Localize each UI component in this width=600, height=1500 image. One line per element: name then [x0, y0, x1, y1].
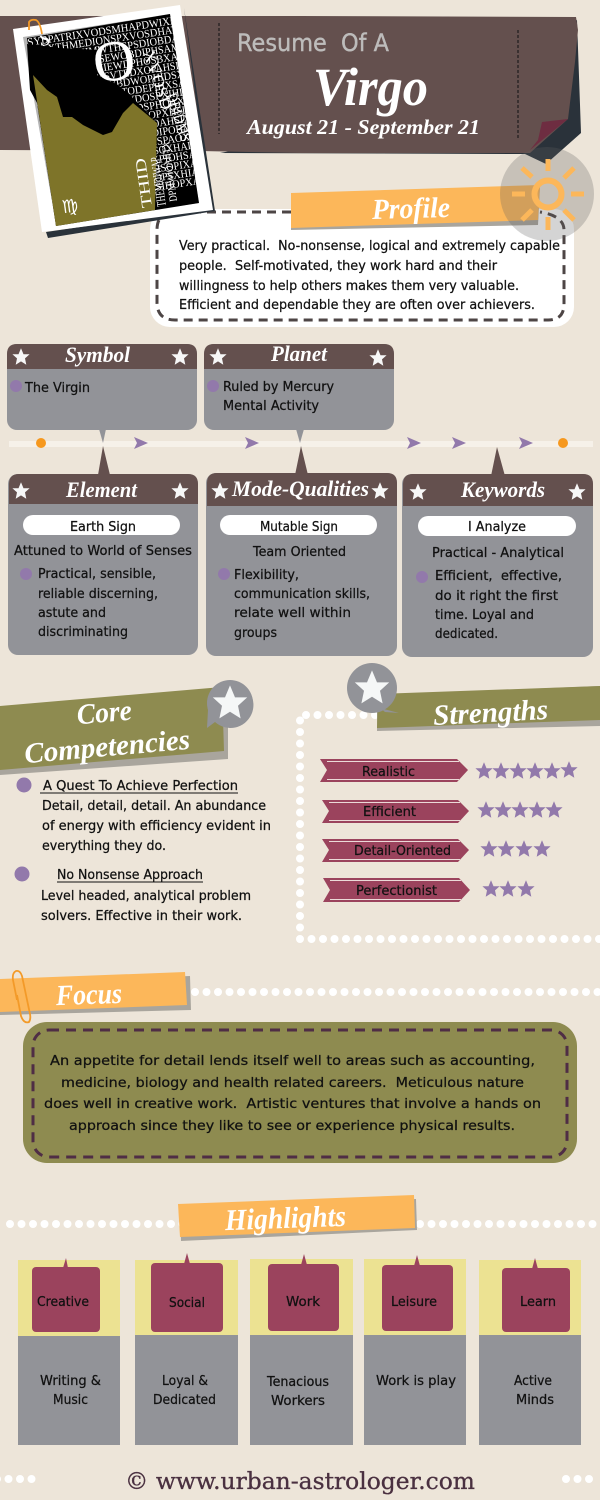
photo card: PSAXTHMEDIONSPXVOSDHAT — [28, 24, 179, 58]
panel: planet: Ruled by Mercury — [223, 380, 334, 395]
highlight: learn: Learn — [520, 1295, 556, 1310]
panel: element: Practical, sensible, — [38, 567, 156, 582]
photo card: HMDSOAPXIWEVTBDHSOPIXA — [48, 157, 198, 191]
header kicker: Resume Of A — [237, 29, 390, 57]
core competencies list: of energy with efficiency evident in — [42, 819, 271, 834]
ribbon: perfectionist: Perfectionist — [356, 884, 437, 899]
highlight: social: Social — [169, 1296, 205, 1311]
panel: mode-qualities: Flexibility, — [234, 568, 299, 583]
photo card: SDIWHPOXAEMTBVDSIHOPXA — [51, 175, 201, 209]
focus dotted line — [195, 988, 600, 996]
panel: element: astute and — [38, 606, 106, 621]
core competencies banner — [0, 680, 253, 775]
profile text box: willingness to help others makes them very valuable. — [179, 279, 519, 294]
photo card: BTPDSOMXAHIVWEDPSOXHAD — [45, 139, 196, 173]
profile banner: Profile — [371, 192, 450, 226]
photo card: MXSIWDHOPEBTAVXSDIPOHM — [43, 122, 193, 156]
panel: planet — [204, 341, 394, 443]
core competencies banner: Core — [75, 695, 133, 731]
photo card: IDOBXSHPEAWMTVDIOPXHSD — [40, 104, 190, 138]
photo card: EIXHDPAOVSTBMDWXPIOHSA — [47, 148, 197, 182]
photo card: THEMDIWAP — [147, 156, 169, 208]
rating: detail-oriented stars — [480, 840, 551, 857]
focus text panel: approach since they like to see or experience physical results. — [69, 1119, 515, 1134]
highlight: creative: Music — [53, 1393, 88, 1408]
panel: element: discriminating — [38, 625, 128, 640]
profile text box: people. Self-motivated, they work hard and their — [179, 259, 498, 274]
photo card: AOTBXPSIDMEHWVDOPSXHIA — [49, 166, 200, 200]
panel: mode-qualities: Team Oriented — [252, 545, 346, 560]
footer url: © www.urban-astrologer.com — [125, 1469, 475, 1495]
virgo sign: ♍︎ — [61, 195, 80, 218]
highlight: leisure: Leisure — [391, 1295, 437, 1310]
title: Virgo — [313, 57, 428, 117]
ribbon: perfectionist — [323, 878, 470, 902]
photo card: DPMWIOAHTX — [160, 141, 180, 202]
photo card: DIMPAXVOHTSEWOBDIPHSAM — [31, 42, 181, 76]
photo card: THID — [133, 157, 156, 209]
highlight: creative: Creative — [37, 1295, 89, 1310]
panel: symbol — [7, 342, 197, 443]
rating: realistic stars — [475, 761, 578, 779]
panel: planet: Planet — [270, 341, 328, 366]
photo card: S — [38, 28, 52, 51]
panel: keywords: Efficient, effective, — [435, 569, 562, 584]
core competencies list: everything they do. — [42, 839, 166, 854]
rating: efficient stars — [477, 801, 563, 818]
strengths banner — [347, 663, 600, 732]
panel: mode-qualities — [206, 446, 397, 656]
photo card: XVSDOPAHIMWTHEPSDIOBDA — [30, 33, 180, 67]
photo card — [13, 5, 215, 238]
core competencies banner: Competencies — [23, 724, 191, 770]
panel: element: Attuned to World of Senses — [14, 544, 192, 559]
photo card: O — [89, 26, 139, 96]
core competencies list: solvers. Effective in their work. — [41, 909, 242, 924]
rating: perfectionist stars — [482, 880, 535, 897]
panel: planet: Mental Activity — [223, 399, 319, 414]
focus text panel: does well in creative work. Artistic ventures that involve a hands on — [44, 1097, 541, 1112]
highlight: work: Workers — [271, 1394, 325, 1409]
highlight: leisure — [364, 1255, 466, 1445]
profile text box: Very practical. No-nonsense, logical and extremely capable — [179, 239, 560, 254]
photo card: DBIDMS — [162, 91, 194, 144]
highlight: learn — [479, 1258, 581, 1445]
dates: August 21 - September 21 — [245, 115, 480, 139]
profile banner — [291, 185, 540, 230]
panel: element: Element — [65, 477, 138, 502]
highlight: work: Work — [286, 1295, 320, 1310]
highlight: creative — [18, 1258, 120, 1445]
profile text box: Efficient and dependable they are often over achievers. — [179, 298, 535, 313]
highlight: social: Dedicated — [153, 1393, 216, 1408]
profile text box — [150, 209, 574, 327]
timeline — [9, 437, 593, 449]
ribbon: efficient: Efficient — [363, 805, 416, 820]
photo card: PAHTDVOMSXIEBWDPOAHSIX — [41, 113, 192, 147]
photo card: SYBPATRIXVODSMHAPDWIXE — [27, 15, 177, 49]
core competencies list: Level headed, analytical problem — [41, 889, 251, 904]
panel: mode-qualities: groups — [234, 626, 277, 641]
panel: element: Earth Sign — [70, 520, 136, 535]
highlights banner — [178, 1195, 417, 1241]
icon: star badge — [207, 680, 253, 728]
paper clip — [29, 20, 42, 34]
ribbon: detail-oriented: Detail-Oriented — [354, 844, 451, 859]
photo card: WBDXSPOIHTMEAVDOSPXIHD — [37, 86, 188, 120]
highlight: learn: Minds — [516, 1393, 554, 1408]
panel: symbol: Symbol — [65, 342, 131, 367]
panel: keywords: Keywords — [460, 477, 545, 502]
panel: mode-qualities: communication skills, — [234, 587, 370, 602]
ribbon: detail-oriented — [322, 839, 469, 862]
panel: keywords: Practical - Analytical — [432, 546, 564, 561]
ribbon: realistic: Realistic — [362, 765, 415, 780]
panel: keywords: time. Loyal and — [435, 608, 534, 623]
focus text panel: An appetite for detail lends itself well to areas such as accounting, — [50, 1054, 535, 1069]
footer dots — [0, 1475, 600, 1483]
highlight: creative: Writing & — [40, 1374, 101, 1389]
panel: symbol: The Virgin — [24, 381, 90, 396]
core competencies list — [14, 778, 271, 924]
core competencies list: Detail, detail, detail. An abundance — [42, 799, 266, 814]
photo card: OVIPDHAXSMWBTODEPIHXSA — [36, 77, 186, 111]
panel: mode-qualities: Mutable Sign — [260, 520, 338, 535]
photo card: HOSPXMTADVIEWDPHOSBXAI — [32, 50, 183, 84]
paper clip — [13, 971, 30, 1022]
panel: mode-qualities: relate well within — [234, 606, 351, 621]
photo card: AXDBPIWOHMSVTEDXOPAHSD — [34, 59, 184, 93]
panel: mode-qualities: Mode-Qualities — [231, 476, 369, 501]
ribbon: efficient — [322, 800, 469, 823]
highlight: leisure: Work is play — [376, 1374, 456, 1389]
highlight: work: Tenacious — [266, 1375, 329, 1390]
strengths banner: Strengths — [432, 694, 549, 732]
strengths ratings — [320, 759, 578, 902]
icon: sun — [500, 147, 594, 241]
core competencies list: A Quest To Achieve Perfection — [43, 779, 238, 794]
strengths dotted frame — [300, 715, 600, 939]
panel: keywords: dedicated. — [435, 627, 498, 642]
focus banner: Focus — [55, 978, 123, 1012]
highlights dotted line — [10, 1220, 600, 1228]
highlights banner: Highlights — [223, 1200, 346, 1237]
focus text panel — [23, 1022, 577, 1163]
icon: star badge — [347, 663, 399, 713]
focus text panel: medicine, biology and health related careers. Meticulous nature — [61, 1076, 524, 1091]
panel: keywords: I Analyze — [468, 520, 526, 535]
panel: element — [8, 446, 198, 655]
focus banner — [0, 971, 191, 1022]
photo card: SEHPAMDOXITVWBDSPHOAXI — [39, 95, 189, 129]
panel: keywords: do it right the first — [435, 589, 558, 604]
highlight: social: Loyal & — [162, 1374, 208, 1389]
header banner — [0, 16, 581, 164]
silhouette — [27, 44, 157, 145]
photo card: XVOSD — [139, 47, 176, 112]
ribbon: realistic — [320, 759, 468, 782]
panel: keywords — [402, 447, 593, 657]
photo card: TMEHODSPIAXVBDWOPHIDSX — [35, 68, 185, 102]
panel: element: reliable discerning, — [38, 587, 158, 602]
highlight: work — [250, 1254, 353, 1445]
core competencies list: No Nonsense Approach — [57, 868, 203, 883]
highlight: social — [135, 1253, 238, 1445]
photo card: DHAVPOISXBEMWDTHSPAOXI — [44, 131, 195, 165]
highlight: learn: Active — [514, 1374, 552, 1389]
